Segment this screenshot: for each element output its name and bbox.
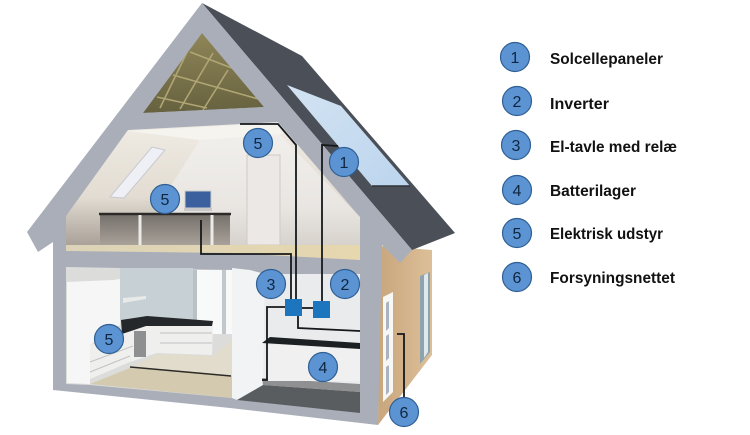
back wall (165, 133, 360, 247)
shadow under desk (100, 215, 230, 246)
laptop (184, 191, 212, 211)
front floor (90, 368, 232, 398)
grey gable front (27, 3, 412, 425)
upper floor (66, 245, 360, 260)
wiring (201, 124, 404, 400)
desk (99, 213, 231, 215)
house cutaway illustration (27, 3, 455, 426)
lower left room: kitchen (66, 267, 232, 398)
marker 2: 2 (341, 277, 350, 294)
legend item 6: 6 (513, 270, 522, 287)
marker 5 laptop (150, 184, 180, 214)
marker 6 (390, 398, 418, 426)
marker 5 office top (244, 128, 272, 158)
upper room (66, 122, 360, 247)
kitchen counter units (90, 323, 213, 379)
marker 5 kitchen: 5 (105, 332, 114, 349)
legend item 3: 3 (512, 138, 521, 155)
door (247, 155, 280, 245)
marker 5 laptop: 5 (161, 192, 170, 209)
legend item 1 (500, 42, 663, 72)
legend item 2: Inverter (550, 96, 609, 113)
counter shelf (262, 337, 360, 349)
marker 3: 3 (267, 277, 276, 294)
legend item 6: Forsyningsnettet (550, 270, 675, 287)
marker 2 (330, 270, 360, 298)
partition wall (232, 268, 265, 400)
legend (500, 42, 677, 292)
legend item 5: 5 (513, 226, 522, 243)
legend item 2 (502, 86, 609, 116)
marker 4 (308, 352, 338, 382)
legend item 3: El-tavle med relæ (550, 139, 677, 156)
skylight (110, 147, 165, 198)
legend item 6 (502, 262, 675, 292)
marker 5 office top: 5 (254, 136, 263, 153)
legend item 2: 2 (513, 94, 522, 111)
marker 6: 6 (400, 405, 409, 422)
legend item 1: 1 (511, 50, 520, 67)
legend item 4: Batterilager (550, 183, 636, 200)
dark roof (202, 3, 455, 250)
marker 4: 4 (319, 360, 328, 377)
brick side wall (378, 246, 432, 425)
battery cabinets (268, 345, 360, 381)
back floor (130, 340, 232, 375)
legend item 5: Elektrisk udstyr (550, 226, 663, 243)
marker 1: 1 (340, 155, 349, 172)
legend item 3 (502, 130, 677, 160)
legend item 4: 4 (513, 183, 522, 200)
hood (123, 296, 146, 303)
tall cupboards (67, 279, 120, 384)
marker 1 (330, 148, 358, 176)
attic insulation (143, 33, 264, 113)
marker 3 (256, 270, 286, 298)
legend item 4 (502, 176, 636, 204)
solar panel (287, 85, 410, 186)
lower right room (237, 274, 360, 413)
legend item 1: Solcellepaneler (550, 51, 663, 68)
legend item 5 (502, 218, 663, 248)
window wall (193, 270, 232, 334)
ceiling highlight (128, 123, 282, 140)
marker 5 kitchen (94, 324, 124, 354)
inverter and relay boxes (285, 299, 330, 318)
